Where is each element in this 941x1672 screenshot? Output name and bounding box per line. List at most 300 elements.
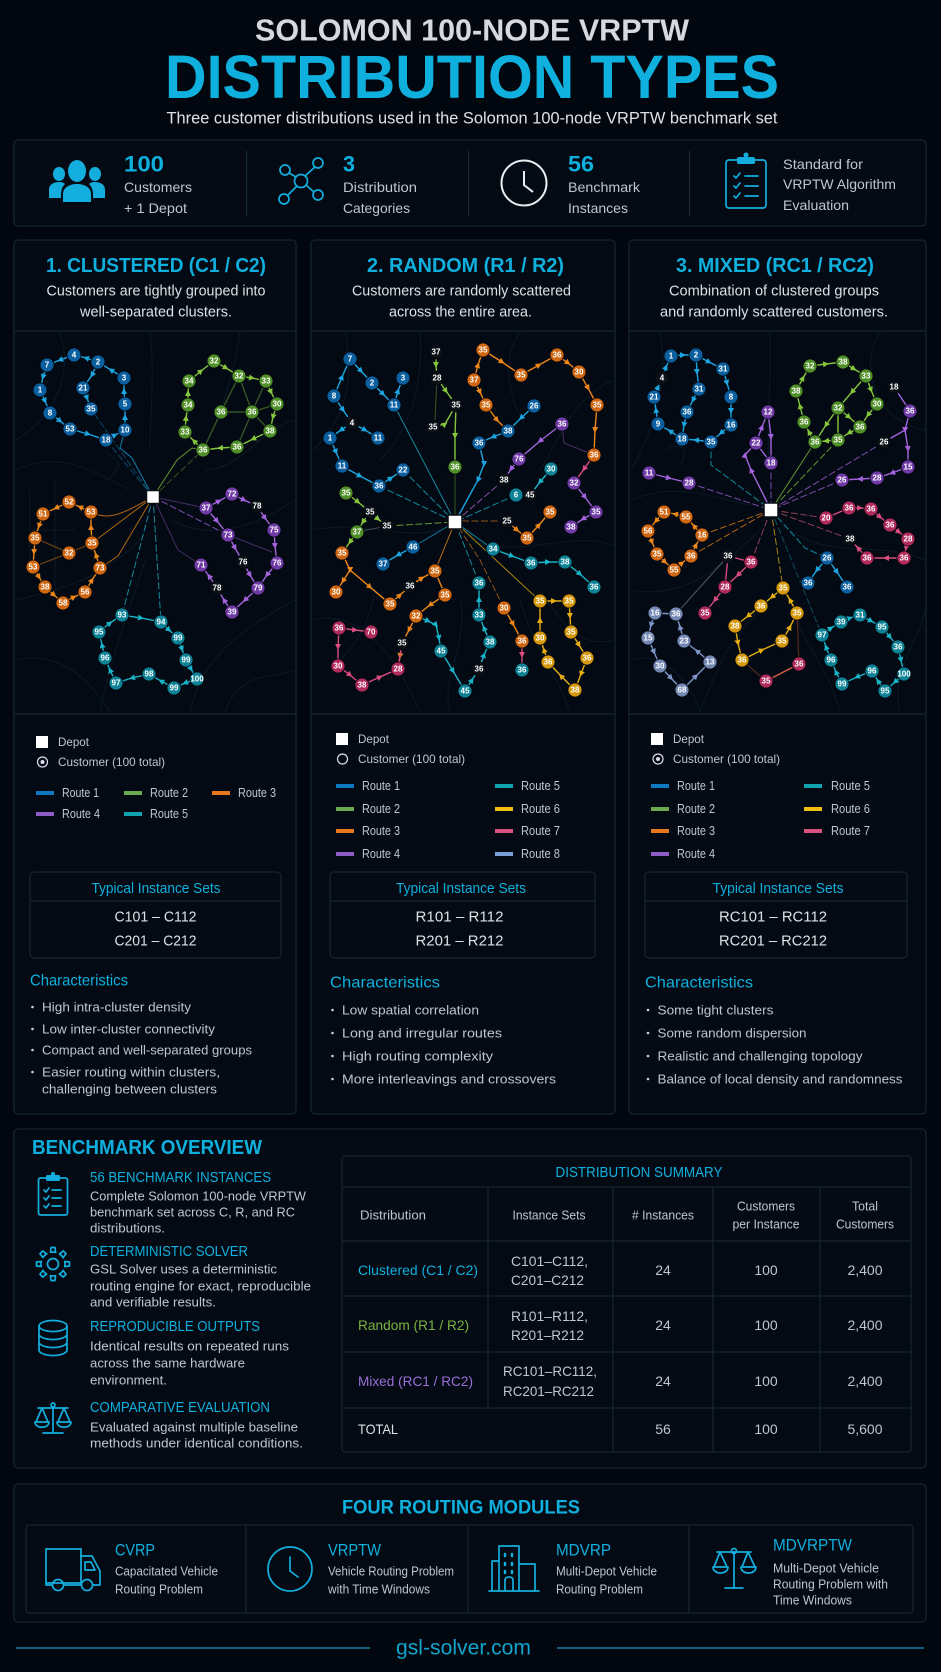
- module: cvrp: CVRP: [115, 1540, 155, 1560]
- customer nodes: 99: [182, 656, 191, 664]
- instance sets: random: [330, 872, 595, 958]
- customer nodes: 56: [644, 526, 653, 536]
- module: mdvrp: MDVRP: [556, 1540, 611, 1560]
- customer nodes: 36: [795, 660, 804, 668]
- instance sets: mixed: [645, 872, 907, 958]
- icon: clock: [502, 160, 546, 206]
- route 3: [336, 350, 597, 669]
- characteristics: mixed: Realistic and challenging topology: [658, 1048, 863, 1064]
- customer nodes: 35: [398, 638, 407, 648]
- legend: mixed: Customer (100 total): [673, 752, 780, 766]
- customer nodes: 38: [567, 522, 576, 532]
- item: deterministic solver: and verifiable results.: [90, 1294, 216, 1310]
- icon: database: [39, 1320, 67, 1356]
- panel: clustered: [14, 240, 296, 1114]
- customer nodes: 56: [81, 588, 90, 596]
- customer nodes: 38: [792, 386, 801, 396]
- characteristics: random: [330, 974, 557, 1086]
- route 4: [455, 406, 596, 527]
- customer nodes: 72: [228, 490, 237, 498]
- customer nodes: 20: [822, 514, 831, 522]
- customer nodes: 36: [856, 422, 865, 432]
- customer nodes: 36: [687, 552, 696, 560]
- legend: random: Route 1: [362, 779, 400, 793]
- customer nodes: 95: [881, 686, 890, 696]
- module: vrptw: VRPTW: [328, 1540, 381, 1560]
- table header: Distribution: [360, 1208, 426, 1222]
- customer nodes: 30: [656, 662, 665, 670]
- row: total: 100: [754, 1421, 778, 1437]
- customer nodes: 51: [39, 510, 48, 518]
- characteristics: random: Long and irregular routes: [342, 1026, 503, 1040]
- row: clustered: Clustered (C1 / C2): [358, 1262, 478, 1278]
- customer nodes: 32: [235, 372, 244, 380]
- customer nodes: 36: [894, 642, 903, 652]
- customer nodes: 35: [779, 584, 788, 592]
- stat: standard: Standard for: [783, 156, 863, 172]
- customer nodes: 79: [254, 584, 263, 592]
- heading: random: 2. RANDOM (R1 / R2): [367, 255, 564, 277]
- customer nodes: 35: [546, 508, 555, 516]
- module: mdvrptw: [773, 1536, 888, 1608]
- customer nodes: 2: [694, 350, 699, 360]
- customer nodes: 55: [670, 566, 679, 574]
- module: vrptw: Vehicle Routing Problem: [328, 1564, 454, 1578]
- customer nodes: 8: [729, 392, 734, 402]
- customer nodes: 22: [752, 438, 761, 448]
- customer nodes: 36: [590, 450, 599, 460]
- module: mdvrptw: MDVRPTW: [773, 1536, 852, 1554]
- customer nodes: 45: [437, 646, 446, 656]
- instance sets: random: R201 – R212: [416, 932, 504, 950]
- table header: # Instances: [632, 1208, 694, 1222]
- panel: four routing modules: [14, 1484, 926, 1622]
- stat: categories: Distribution: [343, 179, 417, 195]
- customer nodes: 8: [48, 408, 53, 418]
- module: vrptw: [327, 1540, 454, 1596]
- customer nodes: 71: [197, 560, 206, 570]
- customer nodes: 38: [504, 426, 513, 436]
- route 2: [342, 352, 456, 553]
- item: deterministic solver: GSL Solver uses a deterministic: [90, 1262, 278, 1276]
- customer nodes: 37: [432, 348, 441, 356]
- customer nodes: 35: [834, 436, 843, 444]
- customer nodes: 31: [719, 364, 728, 374]
- customer nodes: 23: [680, 636, 689, 646]
- icon: network: [279, 158, 323, 204]
- customer nodes: 46: [409, 542, 418, 552]
- customer nodes: 36: [583, 654, 592, 662]
- customer nodes: 36: [845, 504, 854, 512]
- customer nodes: 51: [660, 508, 669, 516]
- row: clustered: 2,400: [847, 1262, 883, 1278]
- row: mixed: [358, 1363, 883, 1399]
- heading: clustered: well-separated clusters.: [79, 304, 232, 320]
- item: reproducible outputs: Identical results on repeated runs: [90, 1338, 290, 1354]
- row: mixed: Mixed (RC1 / RC2): [358, 1373, 473, 1389]
- customer nodes: 35: [593, 400, 602, 410]
- stat: categories: Categories: [343, 200, 410, 216]
- module: mdvrptw: Multi-Depot Vehicle: [773, 1560, 879, 1576]
- customer nodes: 94: [157, 618, 166, 626]
- legend: mixed: Route 6: [831, 802, 870, 816]
- icon: customers: [49, 160, 105, 202]
- row: clustered: C201–C212: [511, 1272, 584, 1288]
- legend: mixed: Route 3: [677, 824, 715, 838]
- stat: instances: [568, 152, 641, 216]
- table header: Customers: [836, 1216, 894, 1232]
- customer nodes: 7: [348, 354, 353, 364]
- customer nodes: 36: [406, 582, 415, 590]
- customer nodes: 3: [122, 374, 127, 382]
- item: comparative evaluation: methods under identical conditions.: [90, 1436, 303, 1450]
- route 6: [735, 510, 799, 681]
- customer nodes: 35: [452, 400, 461, 410]
- heading: clustered: 1. CLUSTERED (C1 / C2): [46, 255, 266, 277]
- module: cvrp: Routing Problem: [115, 1582, 203, 1596]
- characteristics: clustered: Low inter-cluster connectivity: [42, 1022, 216, 1036]
- customer nodes: 36: [217, 408, 226, 416]
- customer nodes: 100: [897, 670, 911, 678]
- customer nodes: 36: [335, 624, 344, 632]
- customer nodes: 78: [253, 502, 262, 510]
- characteristics: clustered: [30, 972, 252, 1096]
- heading: mixed: Combination of clustered groups: [669, 282, 879, 300]
- characteristics: clustered: High intra-cluster density: [42, 1000, 192, 1014]
- legend: clustered: Customer (100 total): [58, 755, 165, 769]
- route 3: [648, 510, 771, 570]
- legend: random: Route 5: [521, 779, 560, 793]
- customer nodes: 32: [412, 612, 421, 620]
- module: mdvrp: Multi-Depot Vehicle: [556, 1564, 657, 1578]
- customer nodes: 21: [79, 384, 88, 392]
- customer nodes: 38: [846, 534, 855, 544]
- characteristics: random: Characteristics: [330, 974, 440, 992]
- customer nodes: 58: [59, 598, 68, 608]
- customer nodes: 36: [757, 602, 766, 610]
- customer nodes: 36: [553, 350, 562, 360]
- customer nodes: 28: [904, 534, 913, 544]
- instance sets: mixed: RC101 – RC112: [719, 908, 827, 926]
- stat: instances: Benchmark: [568, 179, 641, 195]
- customer nodes: 11: [338, 462, 347, 470]
- customer nodes: 96: [868, 666, 877, 676]
- panel: mixed: [629, 240, 926, 1114]
- customer nodes: 99: [170, 684, 179, 692]
- legend: random: Route 4: [362, 847, 400, 861]
- legend: random: Route 7: [521, 824, 560, 838]
- customer nodes: 36: [518, 636, 527, 646]
- customer nodes: 30: [273, 400, 282, 408]
- customer nodes: 1: [328, 434, 333, 442]
- characteristics: mixed: Characteristics: [645, 974, 753, 992]
- customer nodes: 76: [515, 454, 524, 464]
- customer nodes: 36: [233, 442, 242, 452]
- stat: instances: Instances: [568, 200, 628, 216]
- customer nodes: 35: [87, 404, 96, 414]
- row: random: 24: [655, 1317, 671, 1333]
- customer nodes: 70: [367, 628, 376, 636]
- icon: clipboard: [38, 1172, 68, 1215]
- customer nodes: 36: [475, 664, 484, 674]
- customer nodes: 38: [486, 638, 495, 646]
- title: Three customer distributions used in the Solomon 100-node VRPTW benchmark set: [166, 108, 778, 128]
- heading: random: [352, 255, 571, 320]
- customer nodes: 28: [685, 478, 694, 488]
- instance sets: clustered: Typical Instance Sets: [92, 881, 220, 897]
- characteristics: clustered: Compact and well-separated groups: [42, 1042, 252, 1058]
- module: cvrp: [115, 1540, 218, 1596]
- customer nodes: 16: [698, 530, 707, 540]
- customer nodes: 36: [863, 554, 872, 562]
- row: clustered: 100: [754, 1262, 778, 1278]
- customer nodes: 28: [433, 374, 442, 382]
- customer nodes: 26: [880, 438, 889, 446]
- customer nodes: 93: [118, 610, 127, 620]
- route 2: [153, 361, 277, 497]
- customer nodes: 35: [793, 608, 802, 618]
- module: mdvrp: Routing Problem: [556, 1582, 643, 1596]
- row: mixed: 100: [754, 1373, 778, 1389]
- customer nodes: 15: [904, 462, 913, 472]
- customer nodes: 35: [31, 534, 40, 542]
- stat: standard: VRPTW Algorithm: [783, 176, 896, 192]
- item: reproducible outputs: REPRODUCIBLE OUTPUTS: [90, 1319, 260, 1335]
- characteristics: random: Low spatial correlation: [342, 1002, 479, 1018]
- customer nodes: 100: [190, 674, 204, 684]
- customer nodes: 35: [762, 676, 771, 686]
- icon: truck: [46, 1549, 100, 1590]
- customer nodes: 30: [332, 588, 341, 596]
- route 5: [416, 469, 594, 691]
- item: deterministic solver: routing engine for exact, reproducible: [90, 1278, 311, 1294]
- depot marker: [448, 515, 462, 529]
- customer nodes: [26, 348, 284, 695]
- customer nodes: 2: [96, 358, 101, 366]
- customer nodes: 36: [475, 578, 484, 588]
- module: mdvrp: [556, 1540, 657, 1596]
- panel: key stats strip: [14, 140, 926, 226]
- customer nodes: 96: [827, 656, 836, 664]
- customer nodes: 33: [475, 610, 484, 620]
- customer nodes: 33: [262, 376, 271, 386]
- customer nodes: 36: [590, 582, 599, 592]
- row: clustered: C101–C112,: [511, 1253, 588, 1269]
- customer nodes: 31: [695, 384, 704, 394]
- characteristics: clustered: challenging between clusters: [42, 1082, 218, 1096]
- customer nodes: 95: [95, 628, 104, 636]
- heading: clustered: [46, 255, 266, 320]
- customer nodes: 30: [575, 368, 584, 376]
- customer nodes: 36: [804, 578, 813, 588]
- customer nodes: 2: [370, 378, 375, 388]
- customer nodes: 75: [270, 526, 279, 534]
- stat: customers: 100: [124, 152, 164, 176]
- title: SOLOMON 100-NODE VRPTW: [255, 12, 690, 48]
- icon: checklist: [726, 152, 766, 208]
- customer nodes: 26: [530, 402, 539, 410]
- legend: mixed: Route 5: [831, 779, 870, 793]
- customer nodes: 36: [475, 438, 484, 448]
- table: distribution summary: [342, 1156, 911, 1452]
- customer nodes: 38: [266, 426, 275, 436]
- table header: Instance Sets: [512, 1208, 586, 1222]
- module: mdvrptw: Routing Problem with: [773, 1576, 888, 1592]
- heading: mixed: and randomly scattered customers.: [660, 304, 888, 320]
- customer nodes: 36: [672, 610, 681, 618]
- customer nodes: 34: [184, 400, 193, 410]
- map: mixed routes: [631, 332, 925, 712]
- row: random: R201–R212: [511, 1327, 584, 1343]
- customer nodes: [641, 348, 917, 698]
- customer nodes: 4: [350, 418, 355, 428]
- customer nodes: 26: [838, 476, 847, 484]
- legend: mixed: Route 7: [831, 824, 870, 838]
- instance sets: random: Typical Instance Sets: [396, 881, 526, 897]
- customer nodes: 35: [653, 550, 662, 558]
- legend: clustered: Route 2: [150, 786, 188, 800]
- row: mixed: 24: [655, 1373, 671, 1389]
- customer nodes: 36: [199, 446, 208, 454]
- module: mdvrptw: Time Windows: [773, 1592, 852, 1608]
- customer nodes: 96: [101, 654, 110, 662]
- customer nodes: 38: [839, 358, 848, 366]
- customer nodes: 11: [390, 400, 399, 410]
- route 6: [455, 522, 587, 690]
- instance sets: mixed: Typical Instance Sets: [712, 881, 844, 897]
- row: random: 2,400: [847, 1317, 883, 1333]
- item: benchmark instances: Complete Solomon 100-node VRPTW: [90, 1188, 307, 1204]
- customer nodes: 36: [451, 462, 460, 472]
- customer nodes: 32: [834, 404, 843, 412]
- legend: random: Depot: [358, 732, 390, 746]
- route 7: [338, 522, 522, 685]
- stat: standard: Evaluation: [783, 197, 849, 213]
- customer nodes: 76: [239, 558, 248, 566]
- customer nodes: 35: [479, 346, 488, 354]
- row: mixed: RC101–RC112,: [503, 1363, 597, 1379]
- item: deterministic solver: [90, 1244, 311, 1310]
- customer nodes: 18: [767, 458, 776, 468]
- heading: mixed: 3. MIXED (RC1 / RC2): [676, 255, 874, 277]
- customer nodes: 35: [592, 508, 601, 516]
- legend: random: [336, 732, 560, 861]
- customer nodes: 16: [651, 608, 660, 618]
- legend: random: Customer (100 total): [358, 752, 465, 766]
- map: random routes: [313, 332, 613, 712]
- customer nodes: 10: [121, 426, 130, 434]
- heading: four routing modules: FOUR ROUTING MODULES: [342, 1498, 580, 1518]
- item: deterministic solver: DETERMINISTIC SOLVER: [90, 1244, 248, 1260]
- legend: clustered: Route 3: [238, 786, 276, 800]
- customer nodes: 30: [547, 464, 556, 474]
- stat: customers: [124, 152, 192, 216]
- customer nodes: 53: [29, 562, 38, 572]
- customer nodes: 7: [45, 360, 50, 370]
- legend: mixed: Route 2: [677, 802, 715, 816]
- customer nodes: 28: [721, 582, 730, 592]
- row: total: 56: [655, 1421, 671, 1437]
- legend: mixed: Route 4: [677, 847, 715, 861]
- legend: clustered: Route 4: [62, 807, 100, 821]
- customer nodes: 32: [806, 362, 815, 370]
- customer nodes: 1: [669, 352, 674, 360]
- route 4: [649, 387, 910, 510]
- characteristics: mixed: Balance of local density and randomness: [658, 1072, 903, 1086]
- stat: customers: + 1 Depot: [124, 200, 187, 216]
- item: comparative evaluation: COMPARATIVE EVALUATION: [90, 1400, 270, 1416]
- stat: standard: [783, 156, 896, 213]
- heading: random: across the entire area.: [389, 304, 532, 320]
- title: [165, 12, 779, 128]
- customer nodes: 8: [332, 392, 337, 400]
- customer nodes: 99: [174, 634, 183, 642]
- table header: per Instance: [732, 1216, 800, 1232]
- instance sets: mixed: RC201 – RC212: [719, 932, 827, 950]
- module: vrptw: with Time Windows: [327, 1582, 430, 1596]
- customer nodes: 37: [353, 528, 362, 536]
- customer nodes: 35: [386, 600, 395, 608]
- row: random: Random (R1 / R2): [358, 1317, 469, 1333]
- customer nodes: 13: [706, 658, 715, 666]
- table header: Total: [852, 1198, 878, 1214]
- customer nodes: 18: [102, 436, 111, 444]
- customer nodes: 3: [401, 374, 406, 382]
- row: mixed: 2,400: [847, 1373, 883, 1389]
- customer nodes: 33: [181, 428, 190, 436]
- customer nodes: 30: [500, 604, 509, 612]
- customer nodes: 4: [72, 350, 77, 360]
- customer nodes: 35: [517, 370, 526, 380]
- customer nodes: 22: [399, 466, 408, 474]
- customer nodes: 35: [342, 488, 351, 498]
- customer nodes: 28: [873, 474, 882, 482]
- legend: clustered: [36, 735, 276, 821]
- customer nodes: 35: [431, 566, 440, 576]
- module: cvrp: Capacitated Vehicle: [115, 1564, 218, 1578]
- customer nodes: 25: [503, 516, 512, 526]
- characteristics: clustered: Easier routing within clusters,: [42, 1064, 220, 1080]
- customer nodes: 36: [747, 558, 756, 566]
- route 1: [654, 355, 847, 587]
- customer nodes: 78: [213, 584, 222, 592]
- customer nodes: 36: [843, 582, 852, 592]
- customer nodes: 36: [724, 552, 733, 560]
- customer nodes: 35: [88, 538, 97, 548]
- customer nodes: 32: [65, 548, 74, 558]
- customer nodes: 36: [906, 406, 915, 416]
- customer nodes: 73: [224, 530, 233, 540]
- panel: random: [311, 240, 615, 1114]
- depot marker: [146, 490, 160, 504]
- legend: random: Route 3: [362, 824, 400, 838]
- customer nodes: 35: [523, 534, 532, 542]
- customer nodes: 35: [429, 422, 438, 432]
- row: total: [358, 1421, 883, 1437]
- customer nodes: 30: [334, 662, 343, 670]
- table: distribution summary: DISTRIBUTION SUMMARY: [556, 1165, 723, 1181]
- customer nodes: 32: [570, 478, 579, 488]
- customer nodes: 26: [823, 554, 832, 562]
- customer nodes: 98: [145, 670, 154, 678]
- legend: random: Route 8: [521, 847, 560, 861]
- customer nodes: 18: [890, 382, 899, 392]
- characteristics: random: High routing complexity: [342, 1048, 494, 1064]
- customer nodes: 21: [650, 392, 659, 402]
- characteristics: mixed: Some tight clusters: [658, 1002, 774, 1018]
- table header: [360, 1198, 894, 1232]
- customer nodes: 76: [273, 558, 282, 568]
